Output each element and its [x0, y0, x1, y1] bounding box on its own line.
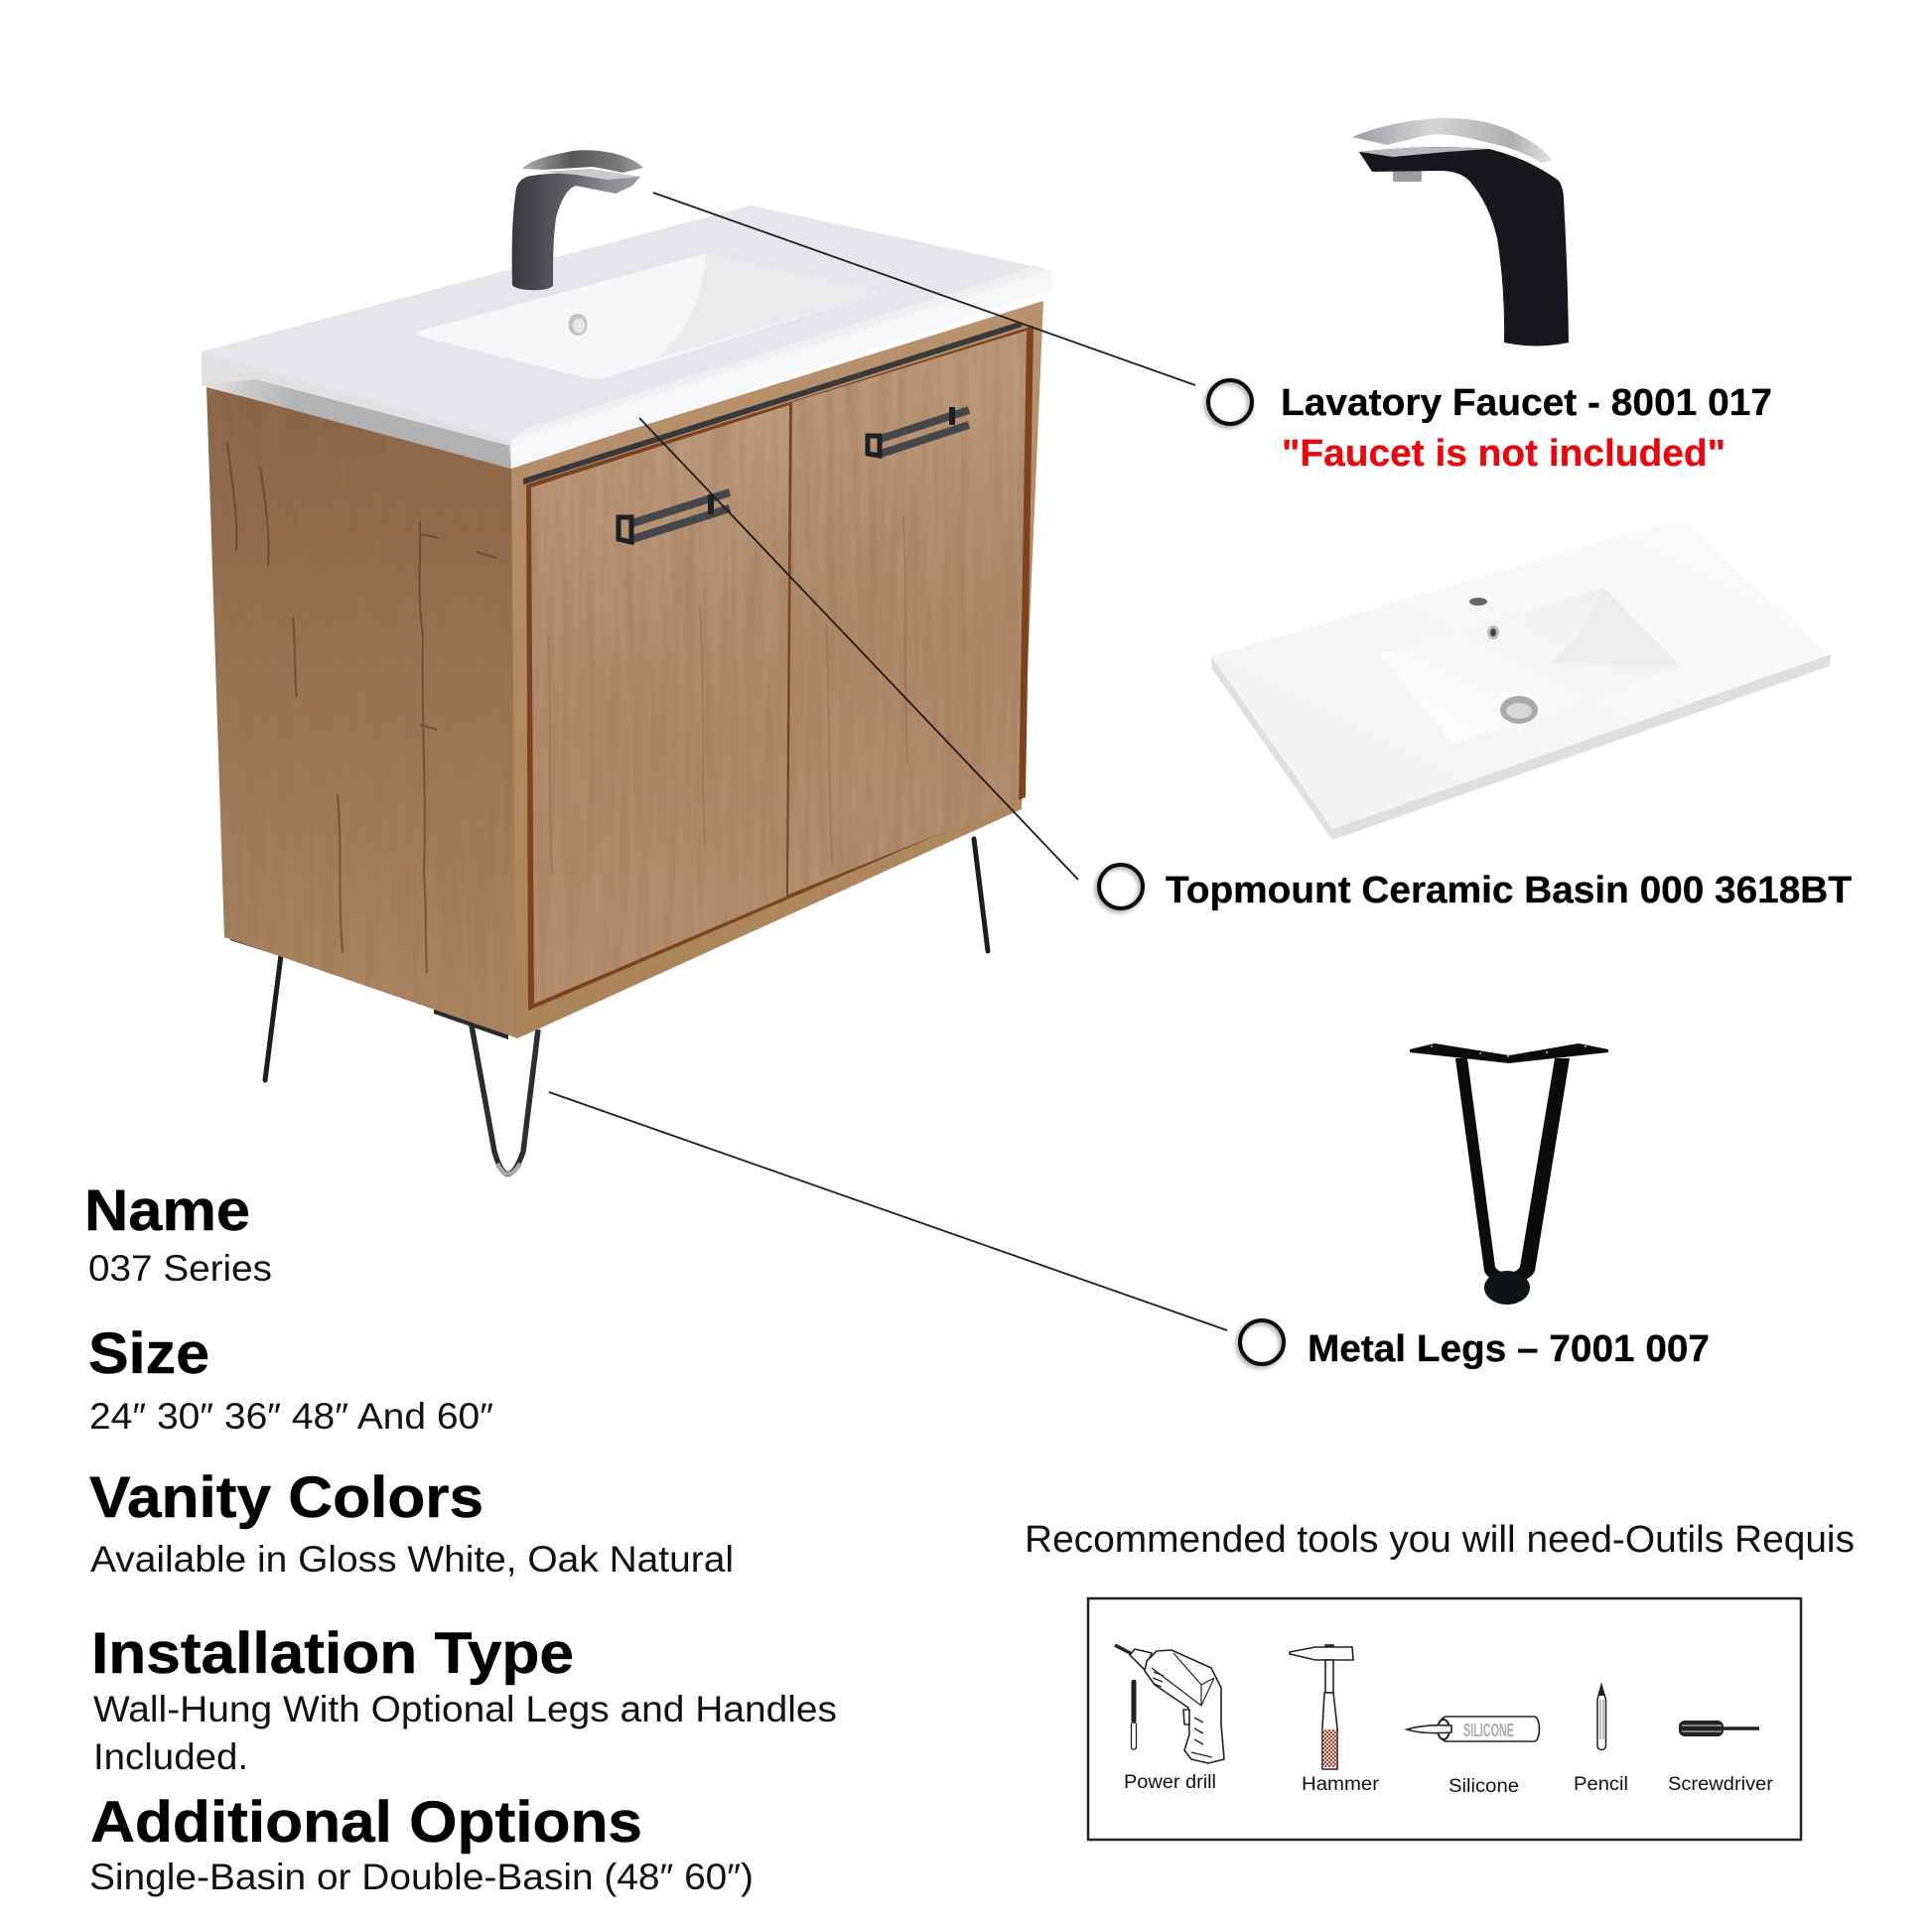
leader line: legs: [549, 1092, 1227, 1330]
marker circle: [1238, 1320, 1284, 1366]
countertop front edge: [511, 270, 1052, 469]
label: screwdriver: Screwdriver: [1668, 1774, 1774, 1795]
left door: [531, 405, 789, 1004]
hairpin rods: [1455, 1058, 1570, 1283]
leader line: basin: [639, 418, 1078, 880]
icon: screwdriver: [1679, 1721, 1759, 1736]
tools panel: [1088, 1598, 1801, 1840]
icon: pencil: [1597, 1685, 1606, 1749]
panel border: [1088, 1598, 1801, 1840]
basin label: Topmount Ceramic Basin 000 3618BT: [1166, 870, 1852, 911]
rear leg right: [974, 839, 988, 951]
front hairpin leg: [472, 1026, 538, 1173]
icon: hammer: [1290, 1645, 1353, 1769]
colors heading: Vanity Colors: [89, 1465, 483, 1530]
marker circle: [1097, 865, 1143, 910]
aerator: [1393, 171, 1422, 182]
size value: 24″ 30″ 36″ 48″ And 60″: [89, 1396, 493, 1437]
faucet body: [1359, 147, 1569, 345]
metal leg product image: [1410, 1043, 1608, 1305]
tap hole: [1469, 598, 1487, 606]
faucet label: Lavatory Faucet - 8001 017: [1281, 382, 1772, 424]
size heading: Size: [88, 1321, 209, 1386]
bowl: [1380, 588, 1681, 745]
countertop left edge shade: [202, 379, 511, 469]
icon: silicone tube: SILICONE: [1463, 1721, 1514, 1740]
label: silicone: Silicone: [1449, 1776, 1519, 1797]
bowl side wall: [655, 254, 878, 359]
door grain: [548, 516, 907, 874]
basin product image: [1211, 518, 1831, 840]
drain: [1500, 696, 1538, 724]
cabinet side panel: [207, 387, 518, 1038]
tools heading: Recommended tools you will need-Outils Requis: [1025, 1519, 1855, 1561]
legs label: Metal Legs – 7001 007: [1308, 1328, 1710, 1370]
callout: faucet: [1206, 380, 1772, 475]
name heading: Name: [84, 1178, 250, 1243]
faucet note: "Faucet is not included": [1282, 433, 1725, 475]
installation value: [93, 1689, 837, 1777]
faucet handle: [522, 150, 643, 173]
callout: basin: [1097, 865, 1852, 911]
marker circle: [1206, 380, 1252, 426]
left door handle: [619, 492, 730, 542]
label: hammer: Hammer: [1302, 1774, 1380, 1795]
chrome handle: [1352, 118, 1552, 163]
dark top rail: [523, 322, 1023, 484]
options heading: Additional Options: [90, 1790, 642, 1855]
installation value: Wall-Hung With Optional Legs and Handles: [93, 1689, 837, 1729]
label: pencil: Pencil: [1574, 1774, 1628, 1795]
colors value: Available in Gloss White, Oak Natural: [90, 1539, 734, 1580]
basin drain: [568, 314, 588, 336]
faucet product image: [1352, 118, 1569, 346]
plate holes: [1431, 1045, 1587, 1057]
specifications text block: [84, 1178, 837, 1897]
basin top: [1211, 518, 1831, 829]
bowl right wall: [1549, 588, 1681, 666]
countertop front lip: [511, 267, 1051, 440]
icon: drill bit: [1132, 1680, 1136, 1749]
name value: 037 Series: [88, 1248, 272, 1289]
icon: power drill: [1115, 1645, 1224, 1763]
basin edge: [1211, 654, 1831, 840]
faucet lip: [541, 169, 640, 180]
rear leg left: [265, 955, 281, 1080]
foot: [1484, 1271, 1530, 1305]
faucet on vanity: [512, 150, 643, 290]
options value: Single-Basin or Double-Basin (48″ 60″): [89, 1857, 754, 1897]
leader line: faucet: [653, 193, 1195, 385]
basin bowl: [417, 254, 878, 379]
right door: [788, 331, 1027, 895]
cabinet front frame: [511, 301, 1043, 1038]
installation heading: Installation Type: [91, 1621, 574, 1686]
frame recess: [526, 326, 1034, 1011]
overflow: [1487, 625, 1499, 639]
side panel knots and cracks: [227, 442, 496, 973]
mounting plate: [1410, 1043, 1608, 1063]
label: power drill: Power drill: [1124, 1772, 1216, 1793]
right door handle: [868, 407, 969, 456]
countertop left edge: [202, 351, 511, 469]
installation value: Included.: [93, 1736, 248, 1777]
under-cabinet mounts: [230, 935, 508, 1039]
icon: silicone tube: [1407, 1717, 1539, 1741]
countertop top surface: [202, 206, 1051, 440]
faucet top strip: [1360, 147, 1489, 157]
vanity product image: [202, 150, 1052, 1173]
callout: legs: [1238, 1320, 1710, 1370]
faucet body: [512, 173, 640, 290]
